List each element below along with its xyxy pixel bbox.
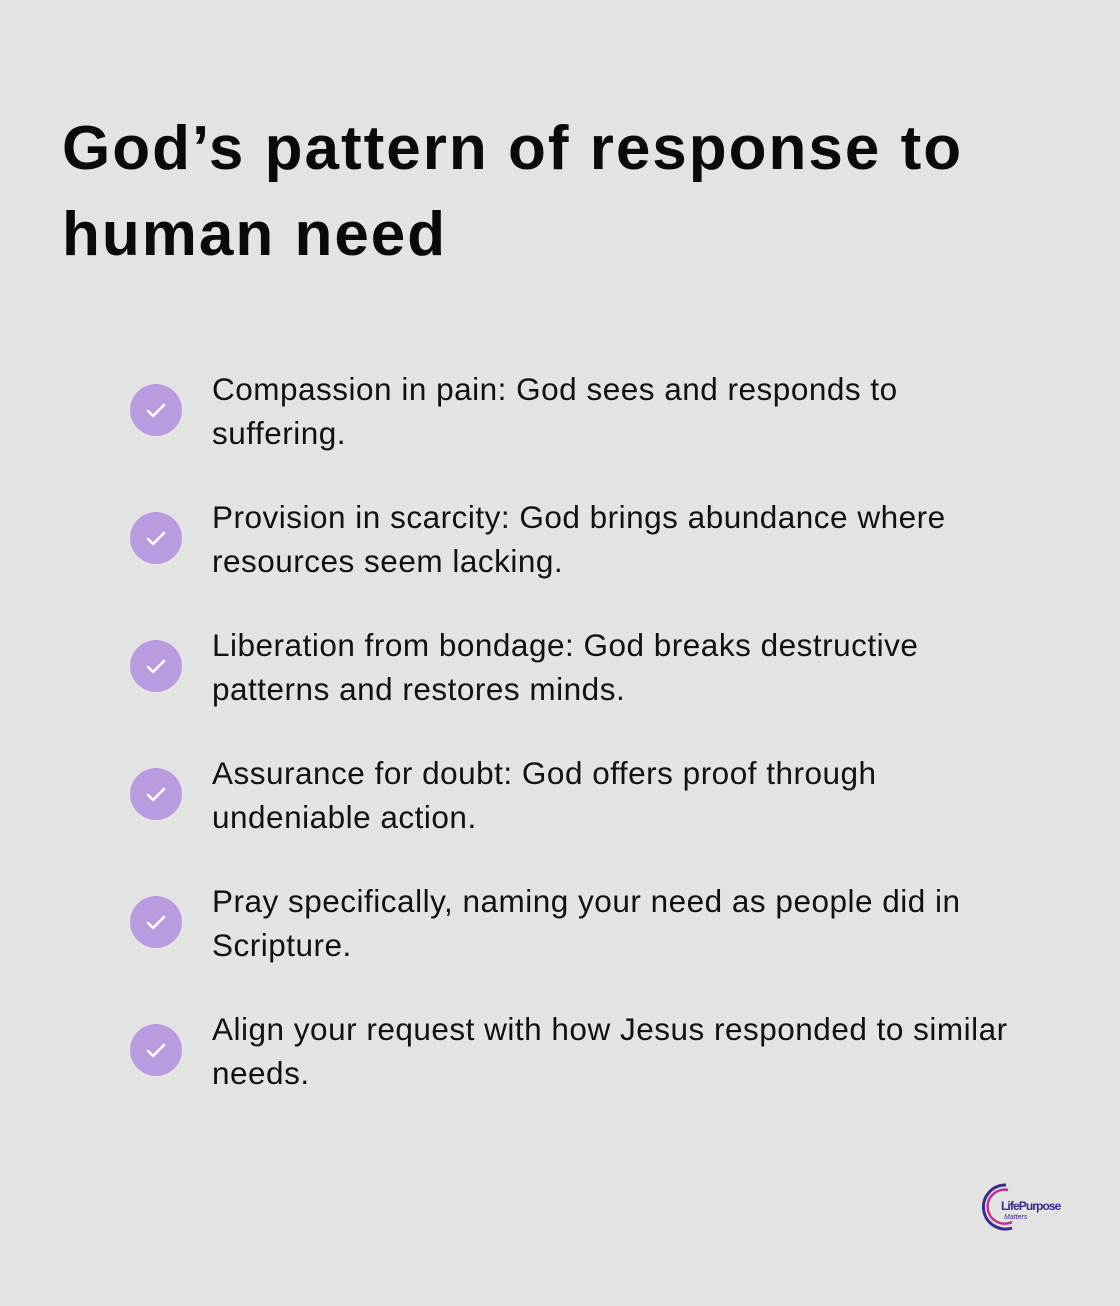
icon: check: [130, 512, 182, 564]
text 5: [212, 883, 961, 963]
text 4: undeniable action.: [212, 799, 477, 835]
text 2: [212, 499, 946, 579]
item 3: [130, 627, 918, 707]
logo: [982, 1184, 1062, 1231]
text 3: Liberation from bondage: God breaks destructive: [212, 627, 918, 663]
logo: LifePurpose: [1001, 1199, 1062, 1213]
logo: Matters: [1004, 1214, 1028, 1221]
title: human need: [62, 200, 447, 269]
item 5: [130, 883, 961, 963]
icon: check: [130, 896, 182, 948]
text 6: [212, 1011, 1008, 1091]
text 2: Provision in scarcity: God brings abundance where: [212, 499, 946, 535]
text 1: [212, 371, 898, 451]
text 4: [212, 755, 877, 835]
text 4: Assurance for doubt: God offers proof through: [212, 755, 877, 791]
text 5: Scripture.: [212, 927, 352, 963]
text 2: resources seem lacking.: [212, 543, 563, 579]
text 1: Compassion in pain: God sees and responds to: [212, 371, 898, 407]
item 2: [130, 499, 946, 579]
icon: check: [130, 384, 182, 436]
item 6: [130, 1011, 1008, 1091]
text 1: suffering.: [212, 415, 346, 451]
icon: check: [130, 1024, 182, 1076]
text 6: needs.: [212, 1055, 310, 1091]
title: [62, 114, 963, 269]
title: God’s pattern of response to: [62, 114, 963, 183]
text 6: Align your request with how Jesus responded to similar: [212, 1011, 1008, 1047]
text 3: patterns and restores minds.: [212, 671, 625, 707]
item 1: [130, 371, 898, 451]
icon: check: [130, 768, 182, 820]
item 4: [130, 755, 877, 835]
text 5: Pray specifically, naming your need as people did in: [212, 883, 961, 919]
icon: check: [130, 640, 182, 692]
text 3: [212, 627, 918, 707]
